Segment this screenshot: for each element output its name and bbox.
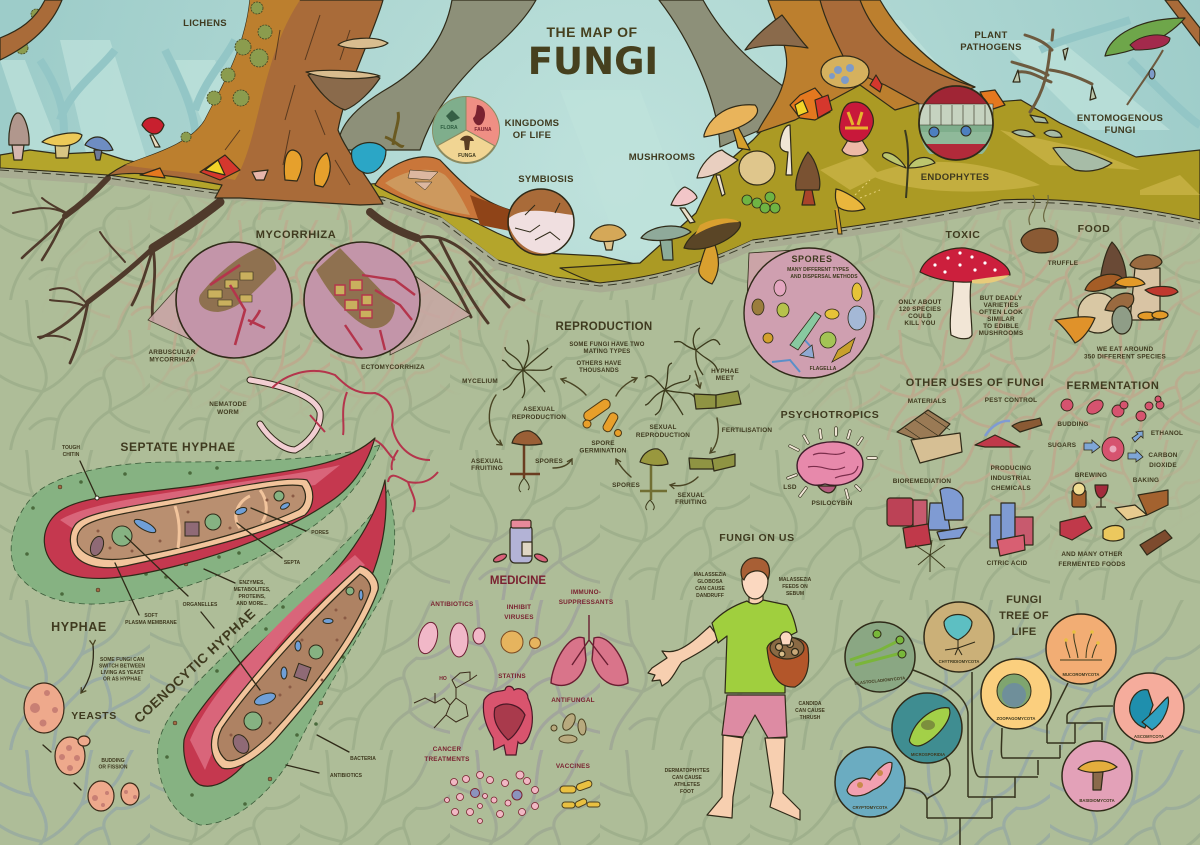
plant pathogens tree (1012, 30, 1096, 112)
panel: toxic: TOXIC (946, 229, 980, 241)
panel: septate hyphae: METABOLITES, (234, 587, 271, 593)
panel: medicine: ANTIFUNGAL (551, 697, 595, 704)
panel: fermentation: SUGARS (1048, 442, 1077, 449)
panel: fungi on us (648, 532, 826, 820)
legs (707, 735, 743, 818)
text: plant pathogens: PATHOGENS (960, 42, 1022, 53)
panel: reproduction: ASEXUAL (523, 406, 555, 413)
panel: fungi tree of life (835, 594, 1184, 845)
panel: food: TRUFFLE (1048, 260, 1079, 267)
yeast cells (24, 683, 139, 811)
panel: fungi on us: GLOBOSA (697, 579, 723, 585)
shorts (722, 695, 787, 738)
symbiosis circle (508, 189, 574, 255)
big tree with roots (13, 0, 524, 363)
inner wall (211, 566, 378, 769)
halo dots (25, 466, 241, 596)
orange fungi at tree base (252, 150, 330, 187)
cytoplasm (77, 485, 305, 559)
panel: psychotropics (781, 409, 879, 507)
arbuscular circle (176, 242, 292, 358)
panel: fermentation: CARBON (1148, 452, 1178, 459)
panel: coenocytic hyphae: COENOCYTIC HYPHAE (131, 606, 259, 726)
lichens on trunk (16, 2, 272, 142)
panel: fungi tree of life: FUNGI (1006, 594, 1042, 606)
basket (767, 632, 809, 687)
panel: fermentation: BAKING (1133, 477, 1159, 484)
cancer cells (444, 771, 538, 824)
title: THE MAP OF (546, 24, 638, 40)
panel: reproduction: FERTILISATION (722, 427, 772, 434)
text: kingdoms of life: KINGDOMS (505, 118, 559, 129)
panel: toxic: COULD (908, 313, 932, 320)
panel: mycorrhiza: MYCORRHIZA (256, 229, 336, 241)
red body (184, 480, 386, 786)
zoom triangle left (148, 262, 230, 358)
panel: medicine: ANTIBIOTICS (430, 601, 474, 608)
bread (1115, 490, 1168, 520)
panel: coenocytic hyphae: ANTIBIOTICS (330, 773, 363, 779)
panel: other uses of fungi: PEST CONTROL (985, 397, 1037, 404)
molecule (414, 672, 477, 728)
grey-green mushroom (660, 240, 673, 260)
seedling plant (905, 130, 908, 198)
beer and wine (1072, 483, 1108, 507)
tree branches (905, 670, 1113, 845)
nematode worm (209, 371, 430, 460)
text: entomogenous fungi: FUNGI (1104, 125, 1136, 136)
panel: septate hyphae: CHITIN (63, 452, 80, 458)
panel: reproduction: OTHERS HAVE (576, 361, 622, 367)
panel: food: FOOD (1078, 223, 1110, 235)
panel: fermentation: ETHANOL (1151, 430, 1183, 437)
panel: fermentation: BREWING (1075, 472, 1107, 479)
panel: reproduction: SEXUAL (677, 492, 705, 499)
panel: septate hyphae: PLASMA MEMBRANE (125, 620, 178, 626)
panel: toxic: TO EDIBLE (983, 323, 1019, 330)
panel: hyphae and yeasts: OR AS HYPHAE (103, 676, 142, 682)
panel: other uses of fungi: BIOREMEDIATION (893, 478, 951, 485)
panel: septate hyphae: ENZYMES, (239, 580, 265, 586)
panel: reproduction: REPRODUCTION (636, 432, 690, 439)
antifungal cells (551, 712, 587, 743)
panel: mycorrhiza: ARBUSCULAR (148, 349, 196, 356)
arrows (489, 371, 718, 486)
callout lines (80, 461, 306, 615)
pest control (975, 418, 1042, 447)
panel: medicine: IMMUNO- (571, 589, 601, 596)
panel: fungi on us: ATHLETES (674, 782, 701, 788)
panel: psychotropics: LSD (783, 484, 797, 491)
panel: spores: AND DISPERSAL METHODS (790, 274, 858, 280)
microsporidia: MICROSPORIDIA (911, 752, 945, 757)
chocolate (1140, 530, 1172, 555)
tendril (375, 440, 398, 470)
hyphae cells meet (689, 391, 741, 471)
ascomycota: ASCOMYCOTA (1134, 734, 1164, 739)
big dark mushroom (699, 242, 718, 284)
text: kingdoms of life: OF LIFE (513, 130, 551, 141)
panel: hyphae and yeasts: YEASTS (71, 710, 117, 722)
panel: mycorrhiza (148, 229, 471, 371)
panel: other uses of fungi: MATERIALS (908, 398, 947, 405)
panel: toxic: OFTEN LOOK (979, 309, 1023, 316)
text: mushrooms: MUSHROOMS (629, 152, 695, 163)
red cage fungus (842, 140, 868, 156)
panel: reproduction: SPORES (612, 482, 640, 489)
inner wall (70, 479, 313, 568)
panel: fungi tree of life: TREE OF (999, 610, 1049, 622)
panel: fungi on us: DANDRUFF (696, 593, 724, 599)
panel: medicine: VACCINES (556, 763, 591, 770)
panel: hyphae and yeasts (24, 620, 145, 811)
bracket on right tree (745, 15, 808, 50)
panel: hyphae and yeasts: SWITCH BETWEEN (99, 664, 145, 670)
bracket fungi on trunk (306, 38, 388, 110)
text: endophytes: ENDOPHYTES (921, 172, 989, 183)
panel: reproduction: SPORE (591, 440, 615, 447)
basidiomycota: BASIDIOMYCOTA (1079, 798, 1115, 803)
tempeh (1060, 516, 1092, 540)
cytoplasm (218, 574, 371, 761)
panel: septate hyphae: SOFT (144, 613, 158, 619)
blastocladiomycota: BLASTOCLADIOMYCOTA (854, 675, 905, 686)
panel: spores (744, 248, 874, 378)
panel: septate hyphae: PORES (311, 530, 329, 536)
chytridiomycota (924, 602, 994, 672)
panel: food: WE EAT AROUND (1097, 346, 1153, 353)
text: symbiosis: SYMBIOSIS (518, 174, 574, 185)
panel: reproduction: FRUITING (675, 499, 707, 506)
panel: fungi on us: MALASSEZIA (694, 572, 726, 578)
panel: medicine: VIRUSES (504, 614, 534, 621)
citric acid bottles (990, 503, 1033, 556)
pill bottle (492, 520, 549, 564)
panel: fungi tree of life: LIFE (1011, 626, 1037, 638)
panel: hyphae and yeasts: SOME FUNGI CAN (100, 657, 144, 663)
mycelium small (915, 540, 945, 572)
ground mushrooms left (9, 113, 164, 160)
panel: reproduction: REPRODUCTION (512, 414, 566, 421)
panel: septate hyphae (11, 438, 398, 626)
panel: hyphae and yeasts: LIVING AS YEAST (101, 670, 143, 676)
red body (44, 438, 375, 578)
blue cup fungus (352, 142, 386, 173)
panel: fungi on us: CAN CAUSE (795, 708, 826, 714)
truffle (1021, 228, 1058, 253)
background tree: right grey (659, 0, 784, 147)
ground: olive hill (560, 80, 1200, 283)
materials block (897, 410, 962, 463)
panel: medicine: CANCER (433, 746, 461, 753)
panel: medicine: INHIBIT (507, 604, 531, 611)
panel: septate hyphae: ORGANELLES (183, 602, 218, 608)
background tree: left grey (340, 0, 536, 150)
brown morel (802, 185, 815, 205)
panel: reproduction: FRUITING (471, 465, 503, 472)
lungs (551, 615, 628, 685)
stump with fungi (375, 157, 515, 232)
panel: reproduction: MEET (716, 375, 734, 382)
ecto circle (304, 242, 420, 358)
panel: hyphae and yeasts: HYPHAE (51, 620, 107, 634)
kingdoms of life circle: FAUNA (474, 127, 492, 133)
mycelium left (502, 340, 552, 398)
kingdoms of life circle: FUNGA (458, 153, 476, 159)
panel: fermentation: BUDDING (1057, 421, 1089, 428)
mucoromycota: MUCOROMYCOTA (1063, 672, 1099, 677)
text: plant pathogens: PLANT (974, 30, 1008, 41)
panel: toxic: KILL YOU (904, 320, 936, 327)
panel: fungi on us: CAN CAUSE (695, 586, 726, 592)
halo (11, 445, 380, 604)
panel: fungi on us: CANDIDA (798, 701, 822, 707)
coral plant (385, 112, 403, 146)
panel: septate hyphae: SEPTA (284, 560, 301, 566)
shaggy ink cap (780, 125, 792, 175)
panel: psychotropics: PSILOCYBIN (811, 500, 853, 507)
panel: septate hyphae: AND MORE... (236, 601, 268, 607)
panel: reproduction: HYPHAE (711, 368, 739, 375)
soil edge strip (0, 173, 1200, 288)
panel: toxic: MUSHROOMS (979, 330, 1024, 337)
panel: fungi on us: FUNGI ON US (719, 532, 795, 544)
panel: septate hyphae: TOUGH (62, 445, 80, 451)
panel: toxic (898, 229, 1024, 339)
puffball (739, 151, 775, 185)
panel: toxic: ONLY ABOUT (898, 299, 942, 306)
panel: hyphae and yeasts: BUDDING (101, 758, 125, 764)
fermentation arrows (1084, 431, 1143, 462)
cryptomycota (835, 747, 905, 817)
panel: mycorrhiza: ECTOMYCORRHIZA (361, 364, 425, 371)
bowl (1103, 526, 1124, 541)
trunk (107, 0, 383, 205)
small tan mushroom (603, 238, 614, 250)
panel: spores: SPORES (791, 254, 833, 264)
morel (12, 145, 24, 160)
panel: fungi on us: SEBUM (786, 591, 804, 597)
neck (749, 590, 763, 607)
panel: fungi on us: THRUSH (800, 715, 821, 721)
autumn leaves (140, 75, 1005, 180)
panel: reproduction: MYCELIUM (462, 378, 498, 385)
panel: hyphae and yeasts: OR FISSION (99, 764, 128, 770)
roots main (13, 178, 524, 363)
branch top left (0, 0, 62, 60)
panel: medicine: HO (439, 676, 447, 682)
nematode worm: WORM (217, 409, 239, 416)
zoopagomycota: ZOOPAGOMYCOTA (997, 716, 1035, 721)
panel: other uses of fungi: INDUSTRIAL (991, 475, 1031, 482)
small branch top right (1165, 0, 1200, 46)
vaccine capsules (560, 779, 600, 808)
virus (501, 631, 540, 653)
panel: toxic: BUT DEADLY (980, 295, 1022, 302)
callout lines (201, 612, 349, 773)
panel: fermentation: FERMENTED FOODS (1058, 561, 1126, 568)
panel: toxic: VARIETIES (983, 302, 1019, 309)
cryptomycota: CRYPTOMYCOTA (852, 805, 888, 810)
fallen leaves (1012, 115, 1112, 171)
pale mushroom (716, 175, 725, 196)
panel: other uses of fungi: CITRIC ACID (987, 560, 1028, 567)
sky and forest background (0, 0, 1200, 283)
text: lichens: LICHENS (183, 18, 227, 29)
title: FUNGI (528, 40, 658, 83)
panel: fungi on us: FEEDS ON (782, 584, 808, 590)
heart (483, 686, 532, 755)
panel: reproduction: MATING TYPES (584, 349, 630, 355)
panel: reproduction: ASEXUAL (471, 458, 503, 465)
panel: spores: MANY DIFFERENT TYPES (787, 267, 850, 273)
mucoromycota (1046, 614, 1116, 684)
spores cluster (582, 397, 622, 436)
panel: psychotropics: PSYCHOTROPICS (781, 409, 879, 421)
panel: spores: FLAGELLA (810, 366, 837, 372)
background: soil with mycelium (0, 180, 1200, 845)
panel: fermentation: AND MANY OTHER (1061, 551, 1123, 558)
panel: medicine: TREATMENTS (424, 756, 470, 763)
panel: fermentation: DIOXIDE (1149, 462, 1177, 469)
panel: other uses of fungi: PRODUCING (991, 465, 1031, 472)
head (742, 561, 768, 599)
shirt (712, 600, 797, 693)
microsporidia (892, 693, 962, 763)
person (648, 558, 809, 820)
entomogenous fungi leaf (1105, 18, 1185, 105)
panel: other uses of fungi: CHEMICALS (991, 485, 1031, 492)
panel: fungi on us: FOOT (680, 789, 694, 795)
panel: mycorrhiza: MYCORRHIZA (149, 356, 195, 364)
panel: fermentation (1048, 380, 1183, 568)
basidiomycota (1062, 741, 1132, 811)
panel: coenocytic hyphae (131, 472, 438, 825)
panel: other uses of fungi: OTHER USES OF FUNGI (906, 377, 1044, 389)
tendril (388, 472, 438, 512)
blastocladiomycota (845, 622, 915, 692)
panel: reproduction: SOME FUNGI HAVE TWO (569, 342, 645, 348)
nematode worm: NEMATODE (209, 401, 247, 408)
panel: septate hyphae: SEPTATE HYPHAE (120, 440, 236, 454)
panel: fungi on us: MALASSEZIA (779, 577, 811, 583)
blue fungus cluster (821, 56, 869, 88)
panel: coenocytic hyphae: BACTERIA (350, 756, 376, 762)
bioremediation (887, 488, 967, 548)
panel: reproduction: THOUSANDS (579, 368, 619, 374)
mycelium right (645, 328, 720, 415)
panel: toxic: SIMILAR (987, 316, 1015, 323)
panel: reproduction: GERMINATION (579, 448, 627, 454)
cup fungus with spores (835, 207, 842, 234)
ascomycota (1114, 673, 1184, 743)
zoopagomycota (981, 659, 1051, 729)
hill mushrooms (183, 18, 993, 284)
panel: reproduction: SEXUAL (649, 424, 677, 431)
panel: other uses of fungi (887, 377, 1044, 572)
food mushrooms (1055, 242, 1178, 343)
chytridiomycota: CHYTRIDIOMYCOTA (939, 659, 979, 664)
right tree (757, 0, 975, 133)
green tiny mushrooms (742, 192, 780, 213)
endophytes circle (919, 86, 993, 160)
brown mushroom (510, 431, 542, 492)
panel: reproduction (462, 321, 772, 510)
panel: toxic: 120 SPECIES (899, 306, 942, 313)
halo (158, 490, 395, 825)
panel: fungi on us: CAN CAUSE (672, 775, 703, 781)
zoom triangle right (390, 262, 471, 355)
panel: reproduction: REPRODUCTION (556, 321, 652, 333)
panel: medicine: STATINS (498, 673, 526, 680)
panel: medicine (414, 520, 628, 824)
tan big mushroom (728, 118, 750, 150)
panel: septate hyphae: PROTEINS, (239, 594, 266, 600)
kingdoms of life circle: FLORA (440, 125, 458, 131)
olive mushroom (640, 449, 668, 510)
panel: food: 350 DIFFERENT SPECIES (1084, 354, 1167, 360)
kingdoms of life circle (433, 97, 499, 163)
panel: medicine: SUPPRESSANTS (559, 599, 614, 606)
left arm and hand (648, 626, 719, 686)
panel: reproduction: SPORES (535, 458, 563, 465)
pink mushroom (680, 208, 695, 223)
panel: fermentation: FERMENTATION (1067, 380, 1159, 392)
panel: fungi on us: DERMATOPHYTES (665, 768, 709, 774)
ground: left grass strip (0, 150, 640, 283)
bacteria (415, 620, 485, 657)
halo dots (165, 598, 362, 806)
panel: medicine: MEDICINE (490, 575, 546, 587)
panel: food (1021, 195, 1178, 360)
text: entomogenous fungi: ENTOMOGENOUS (1077, 113, 1163, 124)
